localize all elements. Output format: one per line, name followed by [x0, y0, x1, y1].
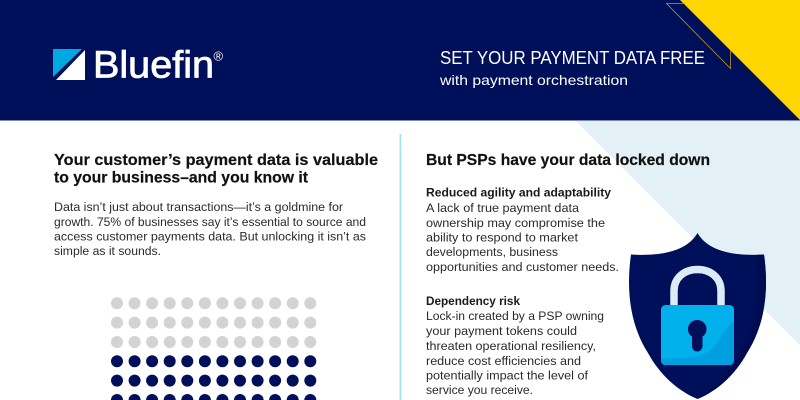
header title: SET YOUR PAYMENT DATA FREE [440, 48, 705, 68]
section: dependency risk: reduce cost efficiencies and [426, 354, 581, 368]
icon: shield with padlock [629, 233, 766, 399]
logo [53, 44, 224, 86]
dot grid chart [111, 297, 316, 400]
section: reduced agility: developments, business [426, 245, 558, 259]
left body text: simple as it sounds. [54, 244, 161, 258]
padlock keyhole [688, 320, 706, 352]
section: dependency risk: threaten operational resiliency, [426, 339, 596, 353]
logo: Bluefin [93, 44, 214, 86]
section: dependency risk: service you receive. [426, 383, 533, 397]
section: reduced agility: Reduced agility and adaptability [426, 186, 611, 200]
left body text: growth. 75% of businesses say it’s essential to source and [54, 215, 366, 229]
padlock body [661, 305, 734, 365]
section: reduced agility: ability to respond to market [426, 230, 579, 244]
left body text: Data isn’t just about transactions—it’s a goldmine for [54, 200, 343, 214]
section: dependency risk: your payment tokens could [426, 324, 577, 338]
section: dependency risk: Dependency risk [426, 294, 520, 308]
logo: ® [214, 48, 224, 64]
left body text: access customer payments data. But unlocking it isn’t as [54, 230, 366, 244]
right heading: But PSPs have your data locked down [426, 152, 710, 169]
section: reduced agility [426, 186, 619, 274]
yellow corner triangle [680, 0, 800, 120]
left heading: Your customer’s payment data is valuable [54, 152, 378, 169]
left heading: to your business–and you know it [54, 170, 309, 186]
light blue background triangle [576, 121, 800, 345]
yellow outline triangle [666, 4, 730, 68]
column divider [400, 134, 401, 400]
section: reduced agility: opportunities and customer needs. [426, 260, 619, 274]
padlock shackle [674, 270, 721, 306]
section: dependency risk: potentially impact the level of [426, 368, 589, 382]
header band [0, 0, 800, 120]
header subtitle: with payment orchestration [439, 72, 628, 88]
section: dependency risk [426, 294, 604, 397]
section: reduced agility: A lack of true payment data [426, 201, 579, 215]
section: reduced agility: ownership may compromise the [426, 216, 605, 230]
section: dependency risk: Lock-in created by a PSP owning [426, 309, 604, 323]
